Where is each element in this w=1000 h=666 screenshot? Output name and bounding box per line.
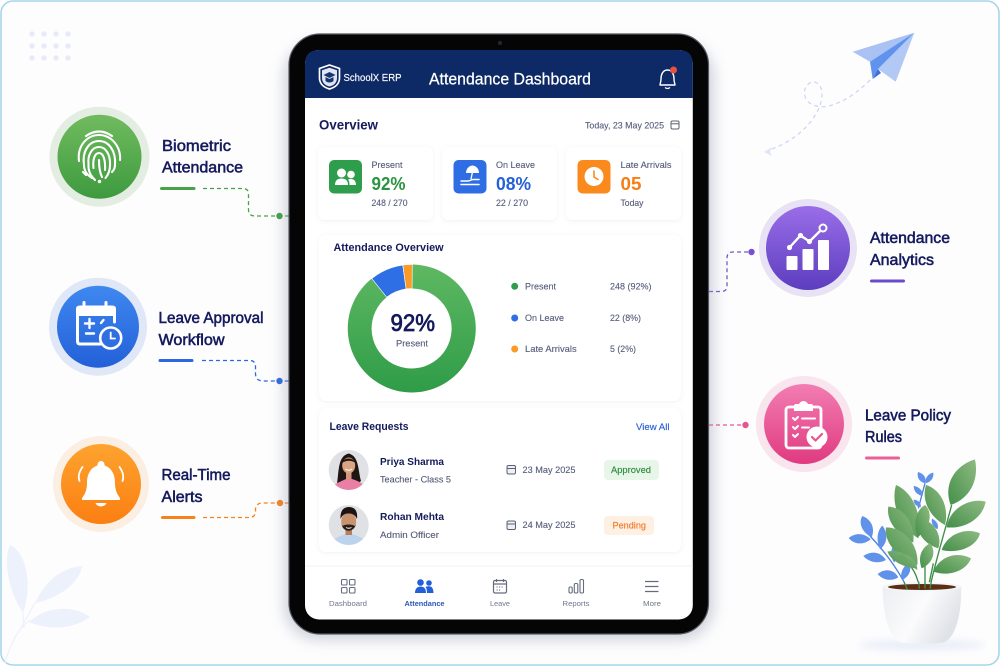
label: Leave Policy — [865, 408, 951, 425]
tablet bezel — [289, 34, 708, 634]
card: present: 92% — [372, 174, 406, 194]
nav: attendance — [404, 579, 444, 608]
decorative dot grid — [29, 31, 71, 61]
date: Today, 23 May 2025 — [585, 121, 664, 131]
feature: biometric attendance — [50, 107, 289, 219]
feature: leave policy rules — [709, 376, 951, 472]
decorative leaves bottom left — [5, 545, 90, 663]
camera — [498, 41, 502, 45]
label — [870, 230, 950, 269]
nav: leave — [490, 579, 510, 608]
nav: leave: Leave — [490, 599, 510, 608]
panel: leave requests — [321, 422, 679, 553]
pot shadow — [858, 640, 985, 650]
icon: clock — [578, 160, 610, 194]
status badge: pending: Pending — [612, 520, 646, 532]
soil — [888, 584, 956, 590]
icon: fingerprint — [50, 107, 150, 207]
request row: Priya Sharma: Priya Sharma — [380, 456, 444, 468]
icon: bar chart with trend — [759, 199, 857, 297]
nav: more — [643, 582, 661, 608]
underline accent — [870, 280, 905, 282]
card: on leave: 22 / 270 — [496, 198, 528, 208]
stem bases over the soil — [904, 582, 931, 589]
icon: beach umbrella — [454, 160, 486, 194]
label: Workflow — [158, 332, 225, 349]
notification bell — [660, 66, 677, 88]
label — [865, 408, 951, 446]
panel heading: Attendance Overview — [334, 242, 444, 254]
calendar icon — [507, 466, 516, 474]
panel: attendance overview — [319, 235, 681, 401]
request row: Rohan Mehta: Rohan Mehta — [380, 511, 444, 523]
card: present — [318, 147, 433, 220]
label: Real-Time — [162, 467, 231, 484]
connector — [203, 500, 289, 518]
panel heading: Leave Requests — [330, 421, 408, 433]
underline accent — [161, 516, 196, 519]
app header — [305, 50, 693, 98]
request row: Rohan Mehta: Admin Officer — [380, 530, 439, 541]
icon: bell — [53, 436, 149, 532]
legend: Late Arrivals — [525, 344, 577, 354]
connector — [202, 360, 289, 384]
request row: Priya Sharma: Teacher - Class 5 — [380, 475, 451, 486]
connector — [709, 422, 749, 428]
legend — [511, 282, 652, 354]
status badge: approved: Approved — [611, 465, 651, 476]
avatar: Rohan — [328, 504, 370, 546]
label: Attendance — [870, 230, 950, 247]
bottom navigation — [305, 566, 693, 608]
feature: attendance analytics — [709, 199, 950, 297]
card: present: 248 / 270 — [372, 198, 408, 208]
underline accent — [865, 456, 900, 460]
dashed trail — [772, 80, 870, 149]
nav: more: More — [643, 599, 661, 608]
connector — [709, 249, 755, 292]
view all link: View All — [636, 422, 670, 433]
card: on leave: On Leave — [496, 160, 535, 170]
label: Alerts — [162, 489, 202, 506]
tablet — [284, 34, 714, 640]
green stems — [908, 505, 952, 587]
green leaves — [886, 459, 986, 574]
label — [162, 138, 243, 177]
avatar: Priya — [328, 449, 370, 491]
card: present: Present — [372, 160, 403, 170]
card: late arrivals: Today — [620, 198, 644, 208]
label: Biometric — [162, 138, 231, 155]
header title: Attendance Dashboard — [429, 70, 591, 88]
nav: dashboard: Dashboard — [329, 599, 367, 608]
nav: dashboard — [329, 580, 367, 608]
legend: On Leave — [525, 313, 564, 323]
donut chart — [348, 264, 476, 392]
card: late arrivals: 05 — [620, 174, 642, 194]
nav: reports: Reports — [562, 599, 590, 608]
overview heading: Overview — [319, 116, 378, 132]
legend: 248 (92%) — [610, 282, 652, 292]
card: late arrivals: Late Arrivals — [620, 160, 672, 170]
feature: leave approval workflow — [49, 278, 289, 384]
brand name: SchoolX ERP — [344, 72, 402, 84]
status badge: pending — [604, 516, 654, 535]
request row: Rohan Mehta — [328, 504, 654, 546]
potted plant — [849, 459, 986, 650]
donut chart: 92% — [390, 310, 435, 337]
card: on leave — [442, 147, 557, 220]
feature: real-time alerts — [53, 436, 289, 532]
label: Leave Approval — [158, 310, 264, 327]
donut chart: Present — [396, 339, 428, 350]
icon: calendar with clock — [49, 278, 147, 376]
legend: 5 (2%) — [610, 344, 636, 354]
logo shield — [320, 65, 340, 89]
connector — [203, 188, 289, 219]
request row: Priya Sharma: 23 May 2025 — [522, 465, 576, 476]
label: Attendance — [162, 160, 243, 177]
pot — [883, 587, 961, 644]
tablet shadow — [284, 42, 714, 640]
status badge: approved — [604, 460, 659, 480]
plane body — [853, 33, 914, 82]
trail arrowhead — [764, 147, 772, 156]
request row: Priya Sharma — [328, 449, 659, 491]
underline accent — [160, 187, 196, 190]
card: on leave: 08% — [496, 174, 531, 194]
label: Analytics — [870, 252, 934, 269]
screen — [305, 50, 693, 620]
legend: Present — [525, 282, 556, 292]
calendar icon — [507, 521, 516, 530]
label — [158, 310, 264, 349]
paper plane with dashed trail — [764, 33, 914, 156]
request row: Rohan Mehta: 24 May 2025 — [522, 520, 576, 531]
card: late arrivals — [566, 147, 681, 220]
underline accent — [158, 359, 194, 362]
nav: attendance: Attendance — [404, 599, 444, 608]
icon: people — [329, 160, 362, 194]
legend: 22 (8%) — [610, 313, 641, 323]
label: Rules — [865, 429, 902, 446]
label — [162, 467, 231, 506]
icon: clipboard with check — [756, 376, 852, 472]
blue sprigs — [849, 472, 938, 588]
nav: reports — [562, 580, 590, 608]
